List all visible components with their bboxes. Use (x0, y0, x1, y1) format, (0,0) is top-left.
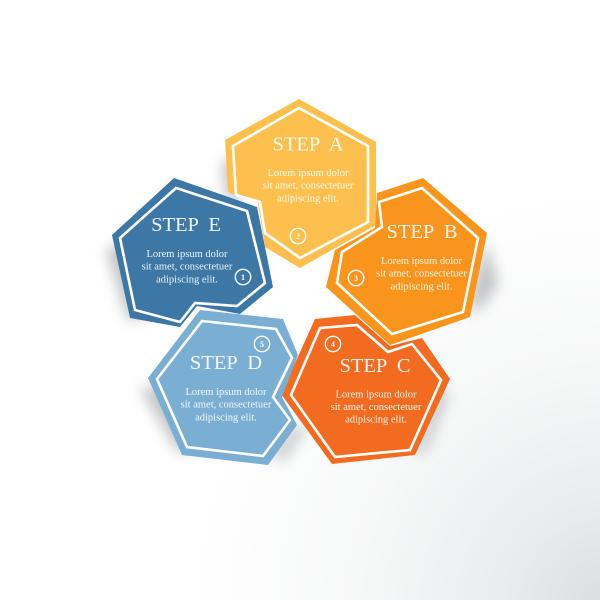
text D: adipiscing elit. (195, 412, 257, 423)
badge 4: 4 (331, 340, 335, 349)
text E: Lorem ipsum dolor (146, 249, 228, 260)
heading D: STEP D (190, 352, 262, 374)
text E (142, 249, 233, 285)
text C: sit amet, consectetuer (331, 402, 422, 413)
text E: adipiscing elit. (156, 274, 218, 285)
text D (181, 387, 272, 423)
text A: Lorem ipsum dolor (267, 168, 349, 179)
badge 2: 2 (296, 232, 300, 241)
text B: adipiscing elit. (391, 281, 452, 292)
badge 5 (254, 336, 270, 352)
text B: Lorem ipsum dolor (381, 256, 463, 267)
panel: step D (148, 310, 298, 465)
inner outline A (233, 108, 368, 258)
panel: step B (326, 178, 487, 345)
panel: step E (112, 178, 273, 327)
inner outline E (120, 188, 265, 322)
badge 3 (348, 270, 364, 286)
text A: adipiscing elit. (277, 193, 339, 204)
heading E: STEP E (151, 214, 221, 236)
badge 2 (290, 228, 306, 244)
badge 1: 1 (241, 273, 245, 282)
inner outline C (291, 325, 441, 457)
text C: adipiscing elit. (345, 415, 407, 426)
heading A: STEP A (272, 134, 344, 156)
text C: Lorem ipsum dolor (335, 389, 417, 400)
text A (263, 168, 354, 204)
badge 3: 3 (354, 274, 358, 283)
text D: Lorem ipsum dolor (185, 387, 267, 398)
text B (376, 256, 467, 292)
badge 5: 5 (260, 340, 264, 349)
panel: step C (281, 315, 450, 464)
inner outline B (337, 188, 478, 334)
heading B: STEP B (386, 221, 458, 243)
heading C: STEP C (339, 355, 411, 377)
panel: step A (225, 99, 376, 268)
text E: sit amet, consectetuer (142, 262, 233, 273)
text A: sit amet, consectetuer (263, 181, 354, 192)
text C (331, 389, 422, 426)
badge 1 (235, 269, 251, 285)
text B: sit amet, consectetuer (376, 269, 467, 280)
badge 4 (325, 336, 341, 352)
text D: sit amet, consectetuer (181, 400, 272, 411)
inner outline D (157, 321, 292, 456)
soft shadows (106, 160, 498, 462)
